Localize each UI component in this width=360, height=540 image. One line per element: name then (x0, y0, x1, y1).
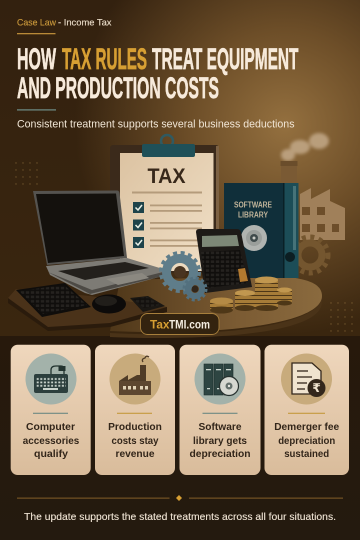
brand badge (140, 314, 219, 334)
eyebrow: case law: - Income Tax (58, 18, 112, 28)
gears (161, 253, 206, 300)
label: qualify (34, 449, 68, 460)
brand badge: TMI.com (169, 320, 210, 332)
footer divider (17, 495, 343, 501)
software library binder: SOFTWARE (234, 200, 273, 210)
software library binder (224, 161, 298, 278)
background gear (292, 237, 328, 273)
smoke (281, 133, 329, 161)
title: TAX RULES (62, 43, 147, 76)
card: computer accessories (11, 345, 91, 475)
icon: document and rupee: ₹ (312, 381, 321, 395)
icon: keyboard (26, 354, 76, 404)
coin stacks (210, 276, 292, 314)
disc (241, 225, 267, 251)
calculator (196, 229, 252, 293)
software library binder: LIBRARY (238, 210, 269, 220)
title (17, 43, 298, 105)
label: revenue (116, 449, 155, 460)
icon: binders and disc (194, 354, 246, 404)
eyebrow: case law: Case Law (17, 18, 57, 28)
chimney (280, 161, 298, 184)
label: sustained (284, 449, 329, 460)
dot pattern left (12, 158, 42, 186)
card: demerger fee (264, 345, 349, 475)
label: Demerger fee (274, 422, 339, 433)
checklist (133, 202, 202, 248)
brand badge: Tax (150, 320, 170, 332)
laptop (33, 190, 163, 295)
card: software library (180, 345, 260, 475)
label: library gets (193, 436, 247, 447)
label: Production (108, 422, 162, 433)
label: depreciation (278, 436, 335, 447)
label: depreciation (190, 449, 250, 460)
clip (142, 135, 195, 157)
label: costs stay (112, 436, 159, 447)
label: Software (198, 422, 242, 433)
label (190, 422, 250, 460)
label (108, 422, 162, 460)
title: HOW (17, 43, 56, 76)
eyebrow: case law (17, 18, 112, 34)
card: production costs (95, 345, 175, 475)
label: Computer (26, 422, 75, 433)
round table (110, 276, 322, 338)
dot pattern right (325, 302, 355, 332)
footer text: The update supports the stated treatments across all four situations. (24, 512, 336, 523)
factory silhouette (300, 188, 345, 240)
desk keyboard and mouse (8, 283, 167, 331)
title divider (17, 109, 56, 110)
clipboard (110, 135, 219, 273)
icon: factory (110, 354, 160, 404)
label (23, 422, 79, 460)
tax heading: TAX (148, 165, 186, 188)
label: accessories (23, 436, 79, 447)
decorative factory and smoke (281, 133, 345, 273)
subtitle: Consistent treatment supports several business deductions (17, 118, 295, 130)
label (274, 422, 339, 460)
